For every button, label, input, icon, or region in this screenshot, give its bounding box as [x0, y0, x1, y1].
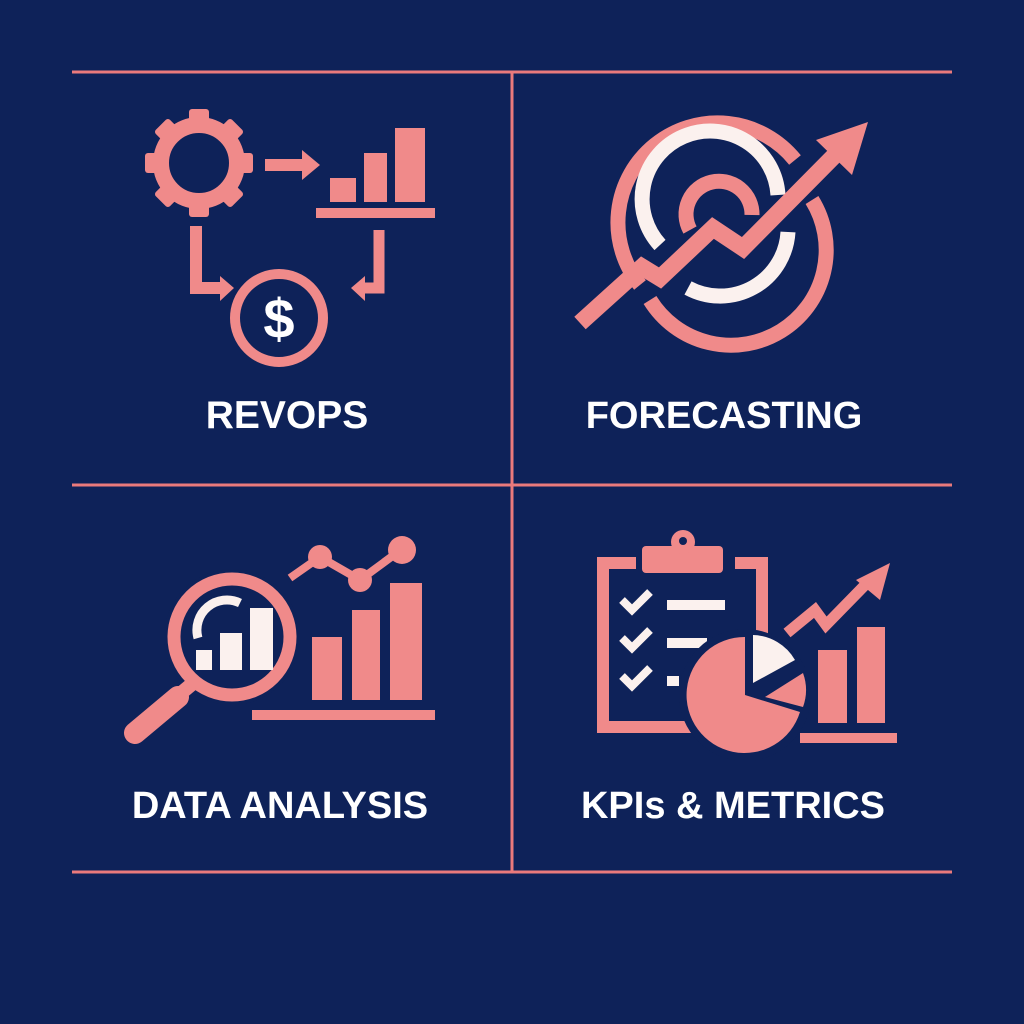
title: forecasting: FORECASTING: [586, 395, 862, 437]
icon: forecasting: [580, 122, 868, 345]
arrow right: [265, 159, 305, 171]
icon: kpis: [603, 530, 897, 761]
gear: [123, 87, 275, 239]
icon: revops: [123, 87, 435, 362]
icon: data analysis: [135, 536, 435, 733]
bars: [330, 178, 356, 202]
title: kpis: KPIs & METRICS: [581, 785, 885, 827]
icon: dollar: $: [263, 287, 295, 350]
title: data analysis: DATA ANALYSIS: [132, 785, 428, 827]
L arrows: [196, 226, 222, 288]
title: revops: REVOPS: [206, 394, 368, 437]
